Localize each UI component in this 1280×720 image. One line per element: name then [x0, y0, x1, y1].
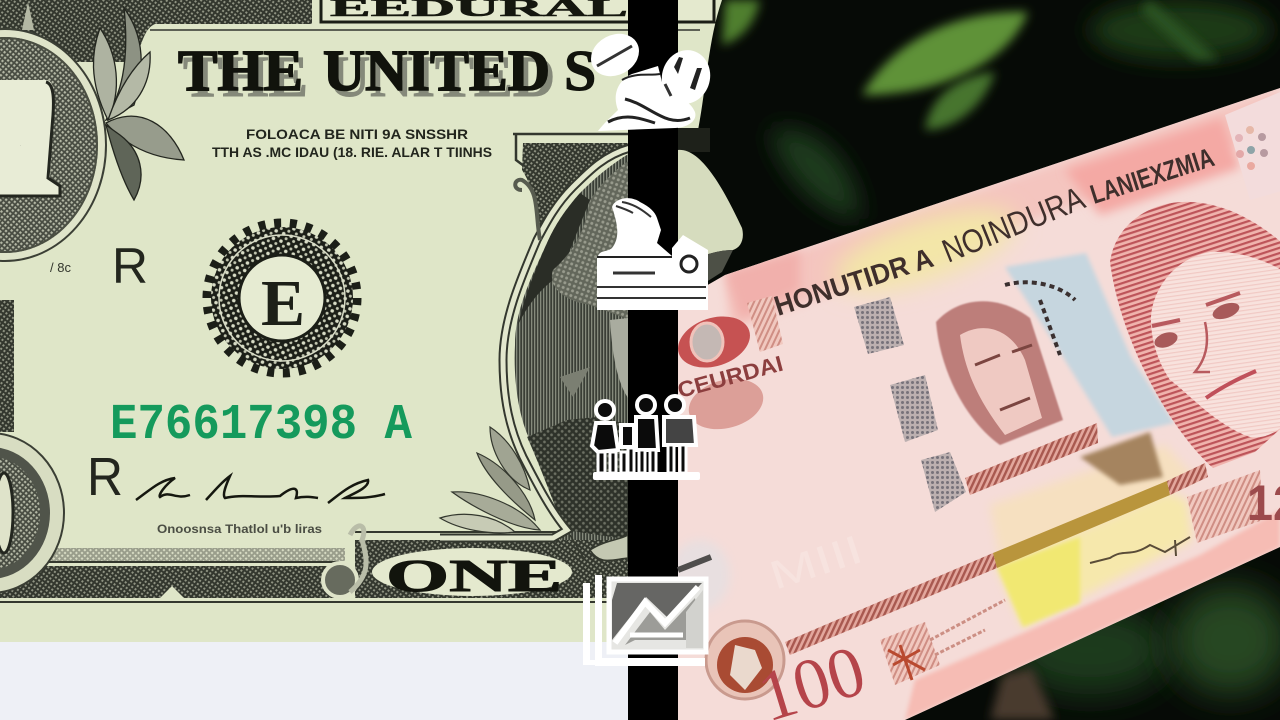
- scroll at base: [570, 535, 628, 560]
- face: [610, 318, 628, 398]
- bright yellow area: [997, 537, 1080, 627]
- bottom ornament: [880, 600, 1005, 685]
- bill paper: [0, 0, 722, 642]
- letter R top: R: [112, 238, 148, 294]
- signature: [136, 476, 385, 503]
- left seal with numeral one: 1: [20, 145, 21, 147]
- icon: cash register: [597, 198, 708, 310]
- signature on yellow block: [1090, 537, 1190, 563]
- letter R bottom: R: [87, 447, 123, 507]
- frame corner top: [513, 134, 630, 166]
- portrait of Washington: [440, 134, 632, 560]
- left seal inscription: CEURDAI: [675, 351, 786, 403]
- icon: line chart on stacked sheets: [583, 575, 706, 666]
- bottom left seal: [0, 433, 64, 593]
- blue security patch: [1005, 253, 1174, 437]
- note inscription: [770, 142, 1218, 322]
- lower diagonal strip, red segment: [785, 553, 997, 655]
- stick behind the divider: [678, 557, 711, 570]
- left pink corner: [725, 250, 800, 320]
- lower diagonal strip, gold segment: [993, 481, 1170, 568]
- left rosy seal: [683, 371, 769, 437]
- pale right corner: [1225, 92, 1280, 171]
- bottom red seal: [706, 621, 784, 699]
- heading: THE UNITED S: UNITED: [328, 44, 555, 109]
- heading: THE UNITED S: THE: [178, 38, 303, 103]
- dotted rosette: [1235, 126, 1268, 170]
- bill portion right of the divider: [678, 128, 743, 300]
- coat: [527, 417, 632, 540]
- icon: food and coffee beans: [584, 26, 716, 131]
- small caption: Onoosnsa Thatlol u'b liras: [157, 522, 322, 536]
- left background: white surface: [0, 640, 640, 720]
- heading: THE UNITED S: S: [564, 38, 596, 103]
- pink top right patch: [1065, 118, 1240, 215]
- dark upper shadow: [518, 193, 590, 325]
- yellow iridescent strip: [831, 202, 1022, 302]
- pink upper edge band: [725, 88, 1280, 330]
- red oval denomination: [678, 316, 750, 368]
- heading: THE UNITED S: [178, 38, 596, 109]
- serial number: E76617398 A: [110, 397, 412, 454]
- corner feather engraving: [522, 143, 628, 225]
- bottom border: [0, 526, 628, 603]
- small legal text: TTH AS .MC IDAU (18. RIE. ALAR T TIINHS: [212, 144, 492, 160]
- US one dollar bill: [0, 0, 743, 642]
- note paper: [678, 80, 1280, 720]
- treasury seal: [207, 223, 357, 373]
- right hatched block: [1187, 470, 1263, 543]
- collar: [560, 367, 590, 397]
- frame lines: [440, 148, 630, 538]
- left red panel: [747, 296, 783, 352]
- note inscription: HONUTIDR A: [770, 242, 937, 322]
- small legal text: FOLOACA BE NITI 9A SNSSHR: [246, 126, 468, 142]
- large portrait: [1110, 202, 1280, 468]
- note inscription: LANIEXZMIA: [1087, 142, 1218, 210]
- small portrait: [936, 282, 1075, 445]
- pale haze near chart icon: [670, 540, 730, 610]
- portrait hatched background: [515, 153, 630, 540]
- grey security squares: [854, 297, 966, 512]
- plate mark left: / 8c: [50, 260, 71, 275]
- peach panel between bands: [990, 445, 1195, 560]
- heading: THE UNITED S: UNITED: [323, 38, 550, 103]
- pink lower edge: [905, 510, 1280, 720]
- top border and corner engraving: [0, 0, 714, 62]
- heading: THE UNITED S: THE: [183, 44, 308, 109]
- left side edge engraving: [0, 300, 14, 432]
- yellow block: [997, 492, 1192, 627]
- leaf ornament near seal: [93, 8, 184, 200]
- treasury seal: E: [261, 267, 305, 340]
- small legal text: [212, 126, 492, 160]
- bottom laurel ornament: [440, 427, 540, 533]
- right background: dark foliage: [640, 0, 1280, 720]
- frame scroll: [515, 180, 540, 240]
- lower diagonal strip, right segment: [1167, 463, 1208, 495]
- icon: family group: [592, 396, 700, 480]
- note inscription: NOINDURA: [937, 179, 1090, 269]
- upper hatched band: [965, 423, 1098, 495]
- Honduran banknote: [670, 80, 1280, 720]
- faint watermark: MIII: [764, 527, 868, 599]
- central black divider: [628, 0, 678, 720]
- bottom border: ONE: [386, 550, 562, 601]
- left seal with numeral one: [0, 2, 106, 261]
- brown stain: [1080, 432, 1163, 485]
- hair: [552, 160, 630, 320]
